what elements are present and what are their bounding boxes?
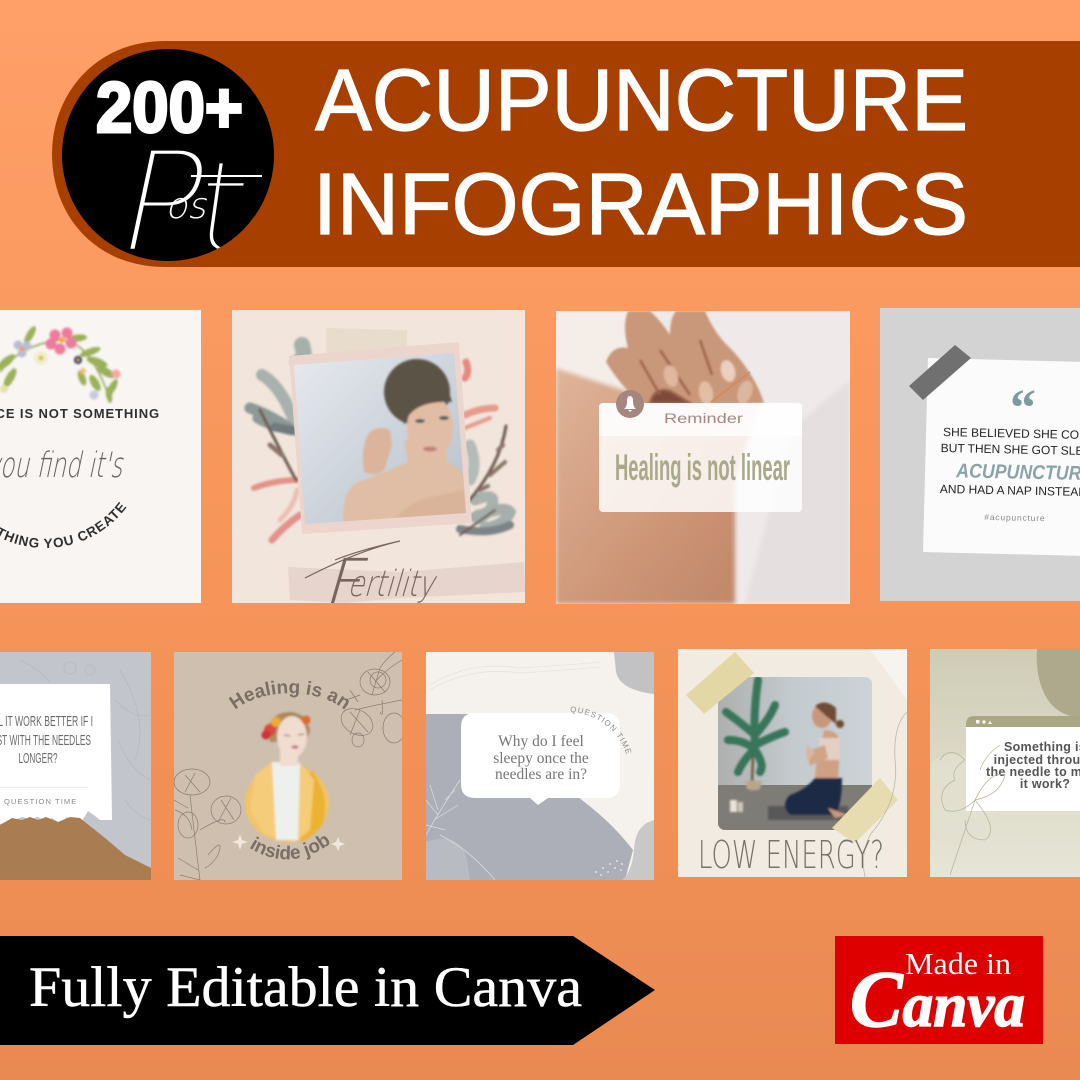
badge number: 200+ [96,69,243,148]
heading: infographics: INFOGRAPHICS [313,156,968,253]
curve line [863,712,907,877]
portrait photo [294,353,466,524]
card background [0,652,151,880]
curved heading bottom: inside job [250,836,330,860]
window dots [976,720,992,724]
question text [986,740,1080,791]
bell icon [616,390,644,418]
note text [939,425,1080,524]
card background [880,308,1080,601]
panel: injection question card [913,649,1080,877]
tape [326,328,407,353]
kraft paper [0,817,151,880]
plant [752,715,755,782]
question text [0,716,92,763]
line flower [940,745,1005,875]
sparkles [232,834,345,851]
blob top right [1037,649,1080,718]
question text: sleepy once the [493,750,589,767]
card background [678,649,907,877]
notification card: Healing is not linear [615,447,790,488]
badge script word: t [187,135,258,283]
dot pattern [595,860,623,876]
badge circle [62,49,274,261]
tape top [686,652,754,714]
badge script word: P [105,121,223,283]
question text: it work? [1020,777,1070,791]
divider [0,787,88,788]
leaf line pattern [20,660,150,820]
low energy heading: LOW ENERGY? [698,833,884,877]
tape bottom [832,778,898,843]
panel: reminder card [556,311,850,604]
panel: fertility card [232,310,525,622]
line art flowers [174,652,405,880]
pale circle [913,754,997,846]
panel: acupuncture quote card [880,308,1080,601]
badge script word: os [163,185,214,227]
notification card [599,390,802,512]
badge: 200+ post [62,49,274,283]
reminder label: Reminder [664,411,744,426]
faint wave lines [430,662,600,690]
question text [493,733,589,783]
panel: sleepy question card [426,652,654,880]
floral wreath [0,325,121,403]
white leaf lines [426,780,495,880]
panel: low energy card [678,649,907,877]
canva wordmark: Canva [850,956,1025,1044]
woman illustration [245,712,329,842]
script word [304,540,438,603]
banner shape [52,41,1080,267]
badge background [835,936,1043,1044]
badge script word [130,150,262,250]
panel: healing inside job card [174,652,402,880]
photo background [556,311,850,604]
hashtag: #acupuncture [984,512,1046,523]
needle [711,372,750,402]
browser window [966,716,1080,811]
brush band [288,562,525,603]
question text: needles are in? [495,766,587,783]
hand [606,311,764,406]
watercolour strokes [250,345,510,540]
curved heading top: Healing is an [228,680,349,710]
note paper [923,358,1080,556]
curved label: QUESTION TIME [570,706,632,754]
card background [426,652,654,880]
tape [909,345,971,400]
badge: made in canva [835,936,1043,1044]
card background [174,652,402,880]
question text: Why do I feel [498,733,584,750]
script word: F [318,544,378,622]
made in label: Made in [905,946,1012,981]
torn paper [0,684,112,824]
abstract blobs [426,714,633,880]
card background [930,649,1080,877]
panel: peace quote card [0,310,201,603]
speech bubble [461,713,620,805]
yoga photo [718,677,872,830]
window bar [966,716,1080,727]
question time label: QUESTION TIME [4,797,77,806]
heading: acupuncture: ACUPUNCTURE [315,52,968,149]
script word: ertility [344,563,443,605]
title banner [52,41,1080,267]
panel: needles question card [0,652,151,880]
question text: LONGER? [18,750,58,767]
arrow banner: fully editable [0,936,655,1045]
arrow label: Fully Editable in Canva [29,956,582,1019]
woman [812,704,832,728]
photo shapes [556,366,848,604]
card background [0,310,201,603]
card background [232,310,525,603]
quote mark: “ [1010,380,1036,437]
arrow shape [0,936,655,1045]
photo frame [289,342,472,534]
